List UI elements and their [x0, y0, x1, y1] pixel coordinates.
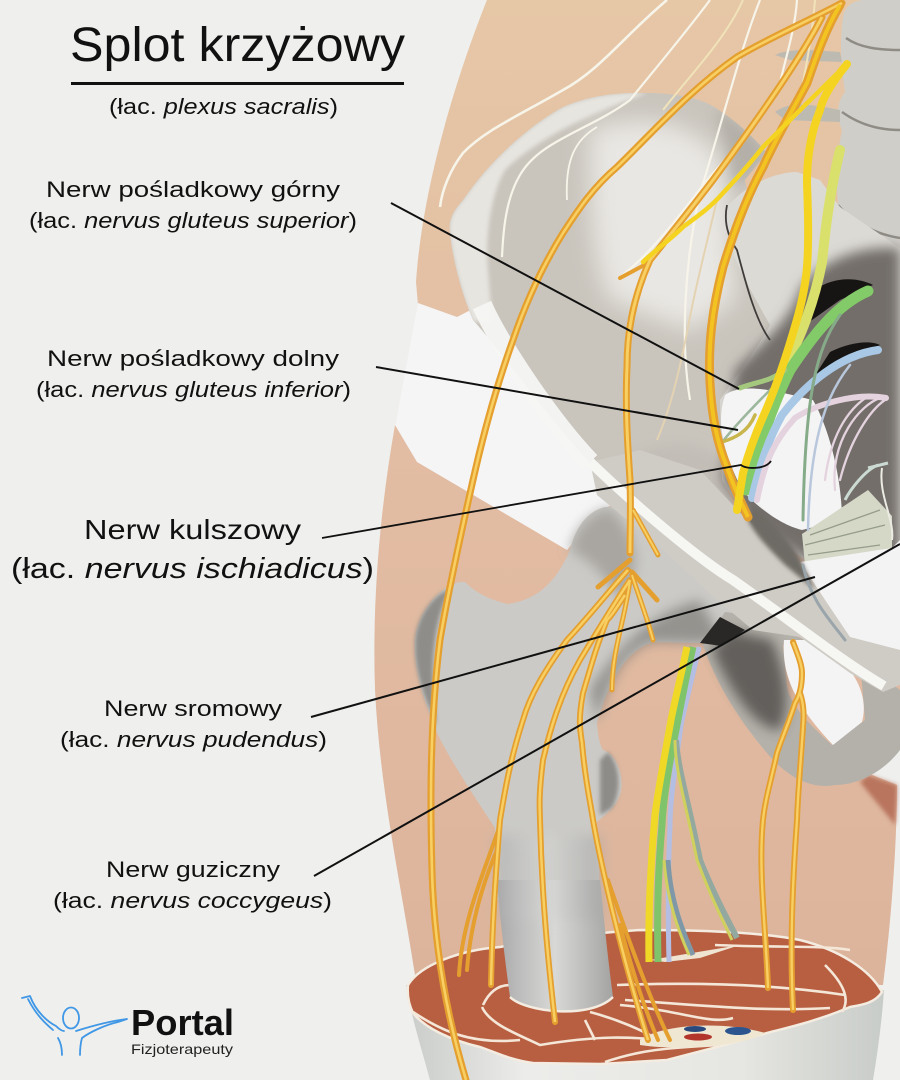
title: Splot krzyżowy — [70, 19, 405, 72]
label: nerw pośladkowy górny: Nerw pośladkowy górny — [46, 177, 340, 202]
label: nerw pośladkowy górny: (łac. nervus gluteus superior ) — [29, 208, 357, 233]
white region behind pubis — [800, 540, 900, 650]
subtitle: (łac. plexus sacralis ) — [109, 94, 338, 119]
leader: nerw kulszowy — [322, 461, 771, 538]
leader: nerw sromowy — [311, 577, 815, 717]
inguinal ligament — [482, 305, 884, 686]
thigh and hip skin — [374, 0, 900, 985]
label: nerw sromowy: (łac. nervus pudendus ) — [60, 727, 327, 752]
sacrotuberous ligament fan — [802, 463, 892, 565]
wordmark: Portal — [131, 1002, 234, 1043]
label: nerw sromowy: Nerw sromowy — [104, 696, 282, 721]
sciatic nerve in thigh: blue, green, yellow strands — [649, 647, 737, 962]
label: nerw pośladkowy górny — [29, 177, 357, 233]
golden nerves: inner core — [431, 3, 842, 1080]
title underline — [71, 82, 404, 85]
label: nerw pośladkowy dolny — [36, 346, 351, 402]
sacrum vertebrae — [775, 0, 900, 248]
thigh cross-section muscles — [408, 930, 882, 1064]
sacral plexus nerve colours — [720, 150, 886, 640]
label: nerw sromowy — [60, 696, 327, 752]
logo: Portal Fizjoterapeuty: Fizjoterapeuty — [131, 1041, 233, 1057]
thigh cross-section base — [406, 985, 884, 1080]
yellow sacral nerve — [643, 64, 847, 510]
superior pubic ramus — [590, 450, 900, 692]
leader: nerw guziczny — [314, 544, 900, 876]
label: nerw guziczny: Nerw guziczny — [106, 857, 280, 882]
label: nerw kulszowy: Nerw kulszowy — [84, 514, 301, 545]
label: nerw pośladkowy dolny: (łac. nervus gluteus inferior ) — [36, 377, 351, 402]
vein — [725, 1027, 751, 1035]
femoral shaft — [494, 835, 613, 1011]
obturator opening — [784, 640, 864, 745]
leader: nerw pośladkowy dolny — [376, 367, 738, 430]
white thin nerves — [440, 0, 815, 440]
artery — [684, 1034, 712, 1040]
ischium shadow — [712, 630, 786, 730]
hip bone: ilium — [450, 92, 770, 506]
white pelvic opening — [721, 389, 842, 530]
leader lines — [311, 203, 900, 876]
label: nerw pośladkowy dolny: Nerw pośladkowy dolny — [47, 346, 339, 371]
logo: Portal Fizjoterapeuty — [22, 996, 234, 1057]
ischium — [703, 612, 900, 786]
leader: nerw pośladkowy górny — [391, 203, 739, 389]
label: nerw kulszowy: (łac. nervus ischiadicus ) — [11, 553, 374, 585]
label: nerw kulszowy — [11, 514, 374, 585]
golden nerves: outer sheath — [431, 3, 842, 1080]
icon: blue figure — [22, 996, 127, 1055]
sacral ala and pelvic wall — [720, 172, 900, 570]
femur — [415, 505, 740, 900]
vein — [684, 1026, 706, 1032]
label: nerw guziczny: (łac. nervus coccygeus ) — [53, 888, 332, 913]
label: nerw guziczny — [53, 857, 332, 913]
white garment band — [395, 300, 612, 550]
